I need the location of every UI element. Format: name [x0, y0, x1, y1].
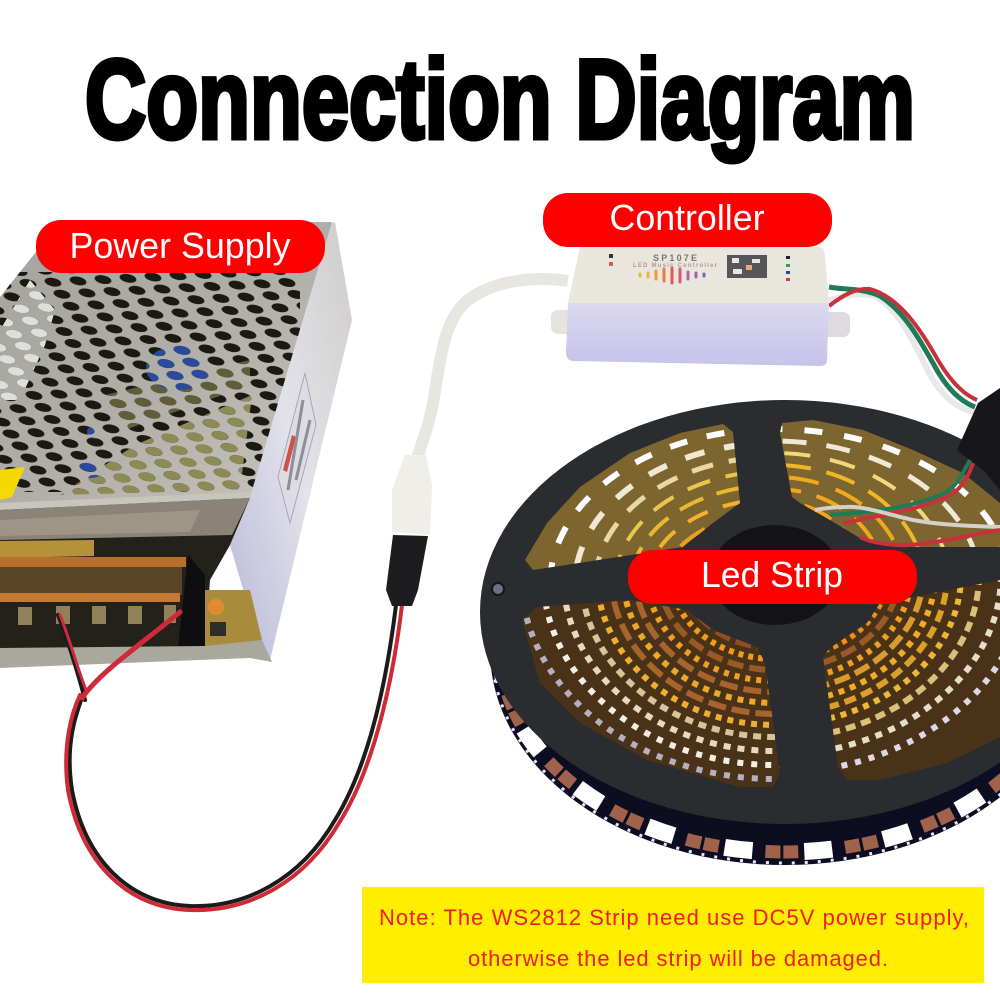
- label: led strip: Led Strip: [701, 554, 843, 595]
- terminal cover orange bars: [0, 557, 186, 602]
- LED reel plate: [480, 371, 1000, 824]
- reel window: lower left: [522, 600, 780, 787]
- reel screw: [492, 583, 504, 595]
- RGB data wire: [829, 287, 977, 412]
- voltage trim board: [178, 555, 262, 650]
- wires into reel: [815, 460, 1000, 545]
- white DC cable from controller: [417, 279, 568, 458]
- LED strip lights: [500, 442, 1000, 852]
- LED strip pads: [500, 442, 1000, 852]
- power supply perforated top panel: [0, 222, 332, 510]
- controller: [551, 247, 850, 366]
- note line two: otherwise the led strip will be damaged.: [468, 946, 888, 971]
- controller mounting ear right: [822, 312, 850, 337]
- controller mounting ear left: [551, 310, 575, 334]
- reel window: upper right: [780, 420, 1000, 547]
- controller label text: SP107E: [653, 253, 697, 263]
- yellow warning sticker: [0, 467, 25, 500]
- DC barrel connector: [386, 455, 432, 606]
- controller front face: [566, 303, 829, 366]
- note line one: Note: The WS2812 Strip need use DC5V power supply,: [379, 905, 969, 930]
- controller sound wave: [640, 268, 704, 283]
- screw terminals: [18, 605, 176, 625]
- label: power supply: Power Supply: [70, 225, 290, 266]
- base tray: [0, 640, 272, 668]
- black data connector: [957, 388, 1000, 490]
- controller QR code: [727, 255, 767, 278]
- note box: [362, 887, 984, 983]
- LED strip outer band: [490, 435, 1000, 865]
- circuit board strip: [0, 540, 94, 558]
- reel hub hole: [710, 525, 840, 625]
- label: power supply: [36, 220, 325, 273]
- controller top face: [568, 247, 829, 303]
- label: controller: Controller: [610, 197, 765, 238]
- power supply unit: [0, 222, 352, 668]
- label: controller: [543, 193, 832, 247]
- black plug body: [386, 535, 428, 606]
- controller: LED Music Controller: [633, 263, 718, 269]
- metal front strip: [0, 498, 250, 540]
- DC power wire loop: [58, 605, 402, 910]
- controller status dots: [609, 254, 790, 281]
- white connector sleeve: [392, 455, 432, 535]
- reel window: upper left: [525, 424, 740, 570]
- LED strip white edge dots: [492, 437, 1000, 863]
- power supply side panel: [230, 222, 352, 660]
- reel window: lower right: [823, 580, 1000, 780]
- side panel spec sticker: [278, 373, 316, 523]
- label: led strip: [628, 550, 917, 604]
- power supply front opening: [0, 498, 250, 652]
